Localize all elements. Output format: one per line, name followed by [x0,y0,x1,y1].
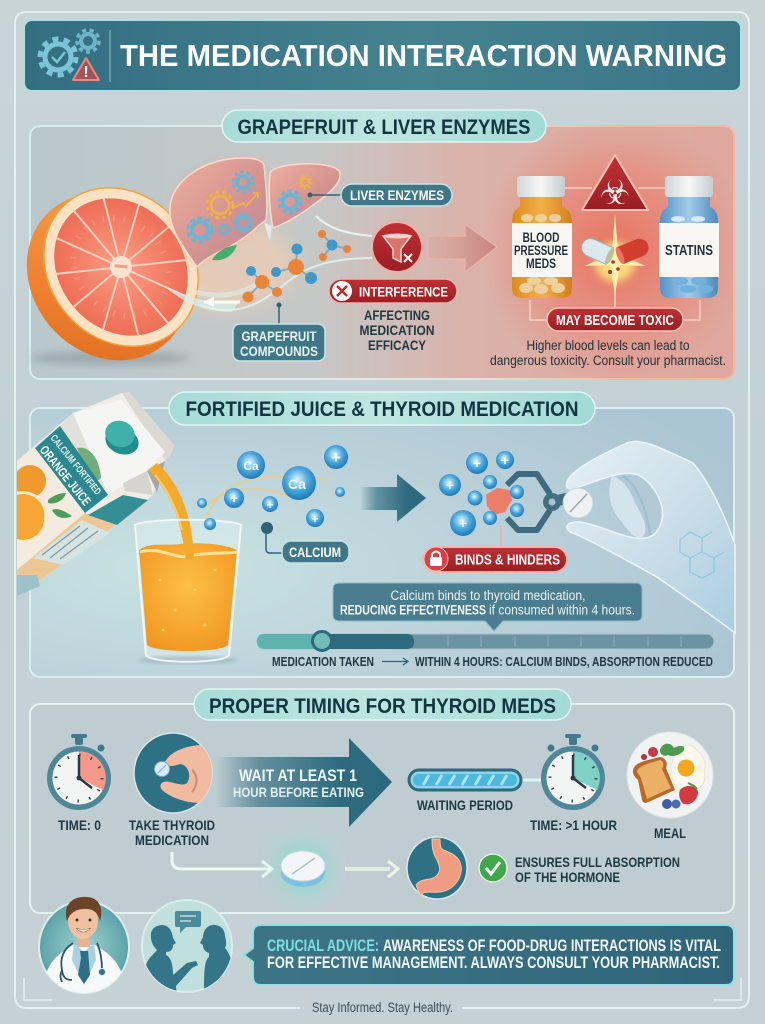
arrow: wait at least 1 hour: HOUR BEFORE EATING [233,784,364,800]
panel: proper timing for thyroid meds [30,704,734,913]
panel: grapefruit and liver enzymes [0,126,734,393]
arrow: calcium binds [360,474,426,522]
icon: stopwatch time 0 [47,734,111,810]
label: grapefruit compounds [233,302,325,361]
heading: proper timing [194,689,571,720]
arrow: to toxicity [428,224,497,272]
icon: hand taking tablet [134,733,214,813]
icon: calcium ions: + [230,490,238,506]
icon: calcium ions [197,445,348,530]
icon: calcium ions: Ca [243,459,259,473]
text: toxicity note: dangerous toxicity. Consult your pharmacist. [490,353,726,368]
heading: grapefruit and liver enzymes [222,110,546,142]
label: may become toxic: MAY BECOME TOXIC [556,313,674,329]
label: binds and hinders [423,525,567,572]
icon: calcium ions: Ca [288,476,306,492]
label: liver enzymes: LIVER ENZYMES [350,187,444,203]
connectors around toxicity [530,188,700,320]
icon: binding ions and clamp: + [446,477,454,493]
icon: consultation silhouettes [142,900,232,995]
callout: reducing effectiveness [333,583,642,631]
icon: calcium ions: + [311,512,319,526]
timeline bar [257,632,714,650]
icon: carton cap [105,420,139,454]
icon: orange juice carton [14,392,174,597]
icon: binding ions and clamp: + [473,455,481,471]
callout: crucial advice [244,925,734,985]
label: interference [329,279,457,303]
icon: stopwatch one hour [541,734,605,810]
text: toxicity note [490,338,726,368]
icon: blood pressure bottle: BLOOD [522,230,560,245]
label: time over 1 hour: TIME: >1 HOUR [530,817,617,833]
waiting period bar: WAITING PERIOD [417,798,513,813]
label: grapefruit compounds: COMPOUNDS [240,343,318,359]
icon: binding ions and clamp: + [501,452,509,468]
label: grapefruit compounds: GRAPEFRUIT [242,328,317,344]
label: binds and hinders: BINDS & HINDERS [455,552,560,568]
heading: fortified juice: FORTIFIED JUICE & THYROID MEDICATION [186,398,578,421]
icon: calcium ions: + [266,498,274,512]
header banner [24,20,741,91]
arrow: tablet to stomach [345,861,398,877]
heading: fortified juice [169,392,595,425]
text: take thyroid medication [129,817,215,848]
title: THE MEDICATION INTERACTION WARNING [120,38,727,73]
icon: grapefruit [0,156,240,393]
panel: fortified juice and thyroid medication [14,392,735,677]
icon: biohazard warning: ☣ [600,173,630,213]
callout: reducing effectiveness: REDUCING EFFECTIVENESS [340,602,486,618]
icon: orange juice carton: CALCIUM FORTIFIED [48,433,103,497]
icon: binding ions and clamp [439,451,572,536]
text: timeline caption [272,654,713,669]
icon: pharmacist portrait [39,897,129,995]
label: liver enzymes [308,184,452,206]
heading: grapefruit and liver enzymes: GRAPEFRUIT & LIVER ENZYMES [238,116,530,139]
arrow: wait at least 1 hour [215,738,392,827]
text: ensures full absorption [515,854,680,885]
label: interference: INTERFERENCE [359,284,448,300]
text: affecting medication efficacy: MEDICATION [360,322,434,338]
text: affecting medication efficacy: EFFICACY [368,337,427,353]
icon: stomach [407,837,467,899]
label: time 0: TIME: 0 [58,817,101,833]
text: affecting medication efficacy: AFFECTING [364,307,430,323]
text: take thyroid medication: TAKE THYROID [129,817,215,833]
label: meal: MEAL [654,825,686,841]
icon: juice glass [135,463,241,664]
text: ensures full absorption: OF THE HORMONE [515,869,620,885]
icon: blood pressure bottle: PRESSURE [514,243,568,258]
callout: reducing effectiveness: Calcium binds to thyroid medication, [390,588,586,603]
icon: gears and warning: ! [83,64,89,81]
label: may become toxic [547,308,683,331]
text: ensures full absorption: ENSURES FULL ABSORPTION [515,854,680,870]
icon: liver [170,158,340,267]
footer tagline: Stay Informed. Stay Healthy. [312,1000,453,1015]
label: calcium [261,522,349,563]
callout: crucial advice: CRUCIAL ADVICE: [267,936,379,955]
arrow: wait at least 1 hour: WAIT AT LEAST 1 [239,766,357,785]
icon: binding ions and clamp: + [459,515,467,531]
icon: gloved hand holding tablet [563,441,735,633]
label: calcium: CALCIUM [289,544,341,560]
callout: reducing effectiveness: if consumed within 4 hours. [489,602,635,618]
icon: glowing tablet [277,842,329,894]
icon: calcium ions: + [331,448,341,467]
icon: white tablet [563,488,593,518]
text: timeline caption: MEDICATION TAKEN [272,654,374,669]
icon: molecules and flow [195,216,372,310]
icon: blood pressure bottle [512,176,572,298]
icon: burst and broken capsule [579,214,651,295]
text: toxicity note: Higher blood levels can lead to [526,338,690,353]
icon: blocked funnel [372,222,422,272]
icon: statins bottle [659,176,719,298]
icon: meal plate [627,732,713,818]
arrow: tablet path [172,852,272,877]
icon: blood pressure bottle: MEDS [526,256,556,271]
text: take thyroid medication: MEDICATION [135,832,209,848]
icon: orange juice carton: ORANGE JUICE [37,442,94,509]
icon: gears and warning [40,30,110,82]
icon: biohazard warning [582,155,648,213]
waiting period bar [409,770,544,813]
heading: proper timing: PROPER TIMING FOR THYROID MEDS [209,695,556,718]
text: affecting medication efficacy [360,307,434,353]
icon: green check [479,854,507,882]
icon: statins bottle: STATINS [665,243,713,259]
